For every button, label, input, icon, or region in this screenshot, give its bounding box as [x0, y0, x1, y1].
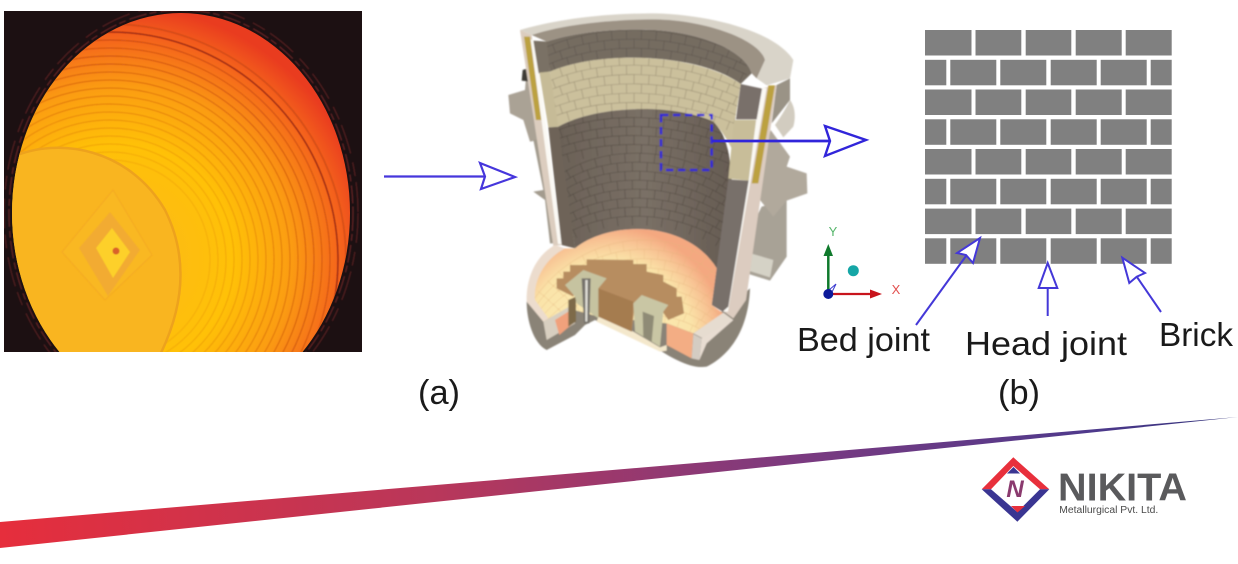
- left column: [568, 297, 576, 327]
- ribbon: gradient diagonal band: [0, 417, 1238, 548]
- arrow: furnace to brick wall: [712, 126, 866, 156]
- upper dark brick band: [547, 30, 752, 84]
- caption (a): (a): [418, 374, 460, 412]
- arrow: photo to furnace: [384, 163, 515, 189]
- rim inner lip: [532, 19, 765, 78]
- arrow: head joint: [1039, 263, 1057, 316]
- light band joints: [552, 58, 740, 130]
- dark brick wall: [558, 109, 732, 268]
- photo: glowing furnace interior: [4, 11, 362, 352]
- axes indicator: X: [892, 282, 901, 297]
- floor diamond pattern: [79, 212, 140, 296]
- external lugs and shell: [508, 68, 807, 281]
- upper band joints: [552, 30, 744, 74]
- tuyere left core: [582, 278, 591, 323]
- logo subtitle: Metallurgical Pvt. Ltd.: [1059, 505, 1158, 516]
- floor joints: [538, 250, 702, 327]
- furnace cutaway model: [508, 12, 808, 368]
- brick wall diagram: [925, 30, 1172, 264]
- cut faces of base: [543, 303, 733, 360]
- axes indicator: Y: [829, 224, 838, 239]
- dashed selection box: [661, 115, 712, 170]
- logo: Nikita Metallurgical: [982, 457, 1187, 522]
- light brick band: [550, 58, 741, 152]
- furnace floor bricks: [528, 229, 723, 333]
- caption (b): (b): [998, 374, 1040, 412]
- top rim: [520, 13, 793, 85]
- floor rim: [527, 245, 565, 322]
- label: brick: Brick: [1159, 316, 1233, 353]
- label: bed joint: Bed joint: [797, 321, 930, 358]
- base outer shell: [527, 288, 750, 367]
- tuyere right core: [643, 312, 654, 342]
- right wall section: [712, 84, 777, 318]
- furnace floor disc: [5, 148, 180, 355]
- central brown brick mass: [557, 259, 684, 332]
- tuyere block left: [565, 270, 607, 318]
- right floor rim: [693, 313, 733, 340]
- arrow: bed joint: [916, 238, 980, 325]
- dark wall joints: [559, 110, 728, 240]
- arrow: brick: [1122, 258, 1161, 312]
- axes indicator: [823, 224, 901, 299]
- brown front face: [598, 288, 633, 332]
- logo diamond red chevron: [982, 457, 1049, 489]
- logo: Nikita Metallurgical: N: [1006, 476, 1024, 503]
- tuyere block right: [633, 295, 668, 347]
- logo wordmark: NIKITA: [1058, 467, 1187, 510]
- left wall section: [520, 30, 575, 248]
- label: head joint: Head joint: [965, 325, 1127, 362]
- logo diamond blue chevron: [982, 489, 1049, 522]
